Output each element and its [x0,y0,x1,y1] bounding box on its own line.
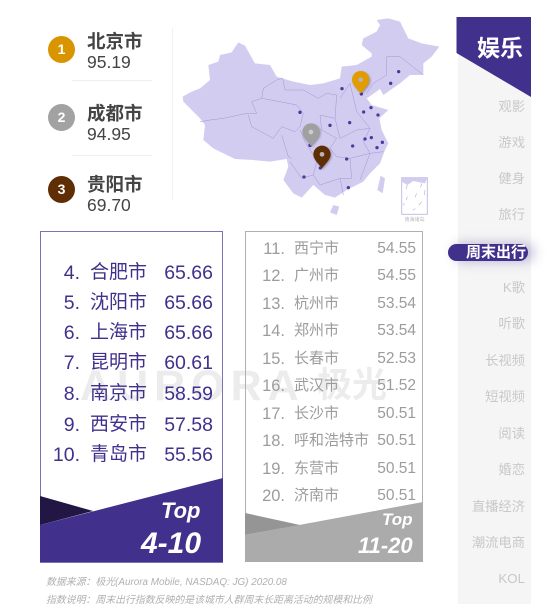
ranking rows: 13. [262,295,285,313]
badge 3: 3 [58,181,65,197]
ranking rows: 广州市 [294,267,339,284]
ranking rows: 长沙市 [294,405,339,422]
ranking rows: 50.51 [377,405,416,422]
ranking rows: 济南市 [294,487,339,504]
sidebar: 听歌 [498,316,525,331]
South China Sea inset: 南海诸岛 [405,216,425,223]
city name: 北京市 [87,31,143,52]
ranking rows: 长春市 [294,350,339,367]
sidebar: 婚恋 [498,462,525,477]
data source note: 数据来源：极光(Aurora Mobile, NASDAQ: JG) 2020.08 [46,577,287,588]
ranking rows: 4. [64,262,80,284]
ranking rows: 5. [64,292,80,314]
sidebar: 旅行 [498,207,525,222]
rank 1 Beijing [48,31,143,72]
ranking rows: 合肥市 [90,262,147,283]
ranking rows: 50.51 [377,460,416,477]
ranking rows: 14. [262,322,285,340]
province borders [200,57,423,195]
ranking rows: 19. [262,460,285,478]
city dots [298,70,400,189]
ranking rows: 南京市 [90,383,147,404]
city name: 贵阳市 [87,174,143,195]
ranking rows: 65.66 [164,292,213,314]
sidebar: 长视频 [485,353,525,368]
ranking rows: 11. [263,240,285,258]
panel: top 4-10 [40,231,223,563]
ranking rows: 20. [262,487,285,505]
sidebar: 健身 [498,171,525,186]
ranking rows: 昆明市 [90,352,147,373]
ranking rows: 58.59 [164,383,213,405]
ranking rows: 65.66 [164,322,213,344]
banner: top 11-20 [245,502,422,561]
sidebar: KOL [498,571,525,586]
sidebar: 游戏 [498,135,525,150]
ranking rows: 西安市 [90,414,147,435]
score: 69.70 [87,195,131,215]
ranking rows: 青岛市 [90,444,147,465]
ranking rows: 55.56 [164,444,213,466]
pin Beijing [352,71,369,94]
ranking rows: 15. [262,350,285,368]
ranking rows: 10. [53,444,80,466]
ranking rows: 上海市 [90,322,147,343]
badge 1: 1 [58,41,65,57]
South China Sea inset [402,178,427,223]
ranking rows [53,262,213,466]
category title: 娱乐 [477,35,523,61]
pin Chengdu [302,123,320,146]
banner range: 4-10 [141,527,201,560]
sidebar: 直播经济 [472,499,525,514]
sidebar category header [456,17,531,97]
watermark: AURORA [80,362,305,410]
banner label: Top [161,498,200,523]
badge 1 [48,36,75,63]
ranking rows: 54.55 [377,267,416,284]
ranking rows: 杭州市 [294,295,339,312]
city name: 成都市 [87,103,143,124]
ranking rows: 12. [262,267,285,285]
sidebar: 短视频 [485,389,525,404]
ranking rows: 54.55 [377,240,416,257]
panel: top 11-20 [245,231,423,562]
ranking rows: 50.51 [377,487,416,504]
ranking rows: 6. [64,322,80,344]
active item: weekend trips: 周末出行 [466,244,526,261]
ranking rows: 呼和浩特市 [294,432,369,449]
index explanation note: 指数说明：周末出行指数反映的是该城市人群周末长距离活动的规模和比例 [46,595,372,606]
watermark: 极光 [317,366,387,405]
ranking rows: 51.52 [377,377,416,394]
rank 2 Chengdu [48,103,143,144]
sidebar items: 观影 [498,99,525,114]
mainland [183,18,439,198]
badge 3 [48,176,75,203]
score: 95.19 [87,52,131,72]
ranking rows: 西宁市 [294,240,339,257]
ranking rows: 郑州市 [294,322,339,339]
sidebar: 阅读 [498,426,525,441]
banner: top 4-10 [40,478,223,562]
map of China [182,18,440,223]
islands [330,176,385,215]
ranking rows: 52.53 [377,350,416,367]
ranking rows: 7. [64,352,80,374]
sidebar: K歌 [503,280,525,295]
ranking rows: 60.61 [164,352,213,374]
ranking rows: 57.58 [164,414,213,436]
sidebar: 潮流电商 [472,535,525,550]
banner label: Top [382,510,413,529]
ranking rows: 16. [262,377,285,395]
ranking rows: 53.54 [377,322,416,339]
ranking rows: 8. [64,383,80,405]
badge 2: 2 [58,109,65,125]
ranking rows: 65.66 [164,262,213,284]
ranking rows: 9. [64,414,80,436]
ranking rows: 18. [262,432,285,450]
banner range: 11-20 [358,533,413,558]
rank 3 Guiyang [48,174,143,215]
ranking rows: 武汉市 [294,377,339,394]
score: 94.95 [87,124,131,144]
ranking rows: 17. [262,405,285,423]
sidebar [458,17,531,604]
pin Guiyang [313,146,331,168]
ranking rows: 沈阳市 [90,292,147,313]
badge 2 [48,104,75,131]
panel: top 3 cities [48,31,152,215]
ranking rows [262,240,416,505]
ranking rows: 53.54 [377,295,416,312]
ranking rows: 50.51 [377,432,416,449]
ranking rows: 东营市 [294,460,339,477]
